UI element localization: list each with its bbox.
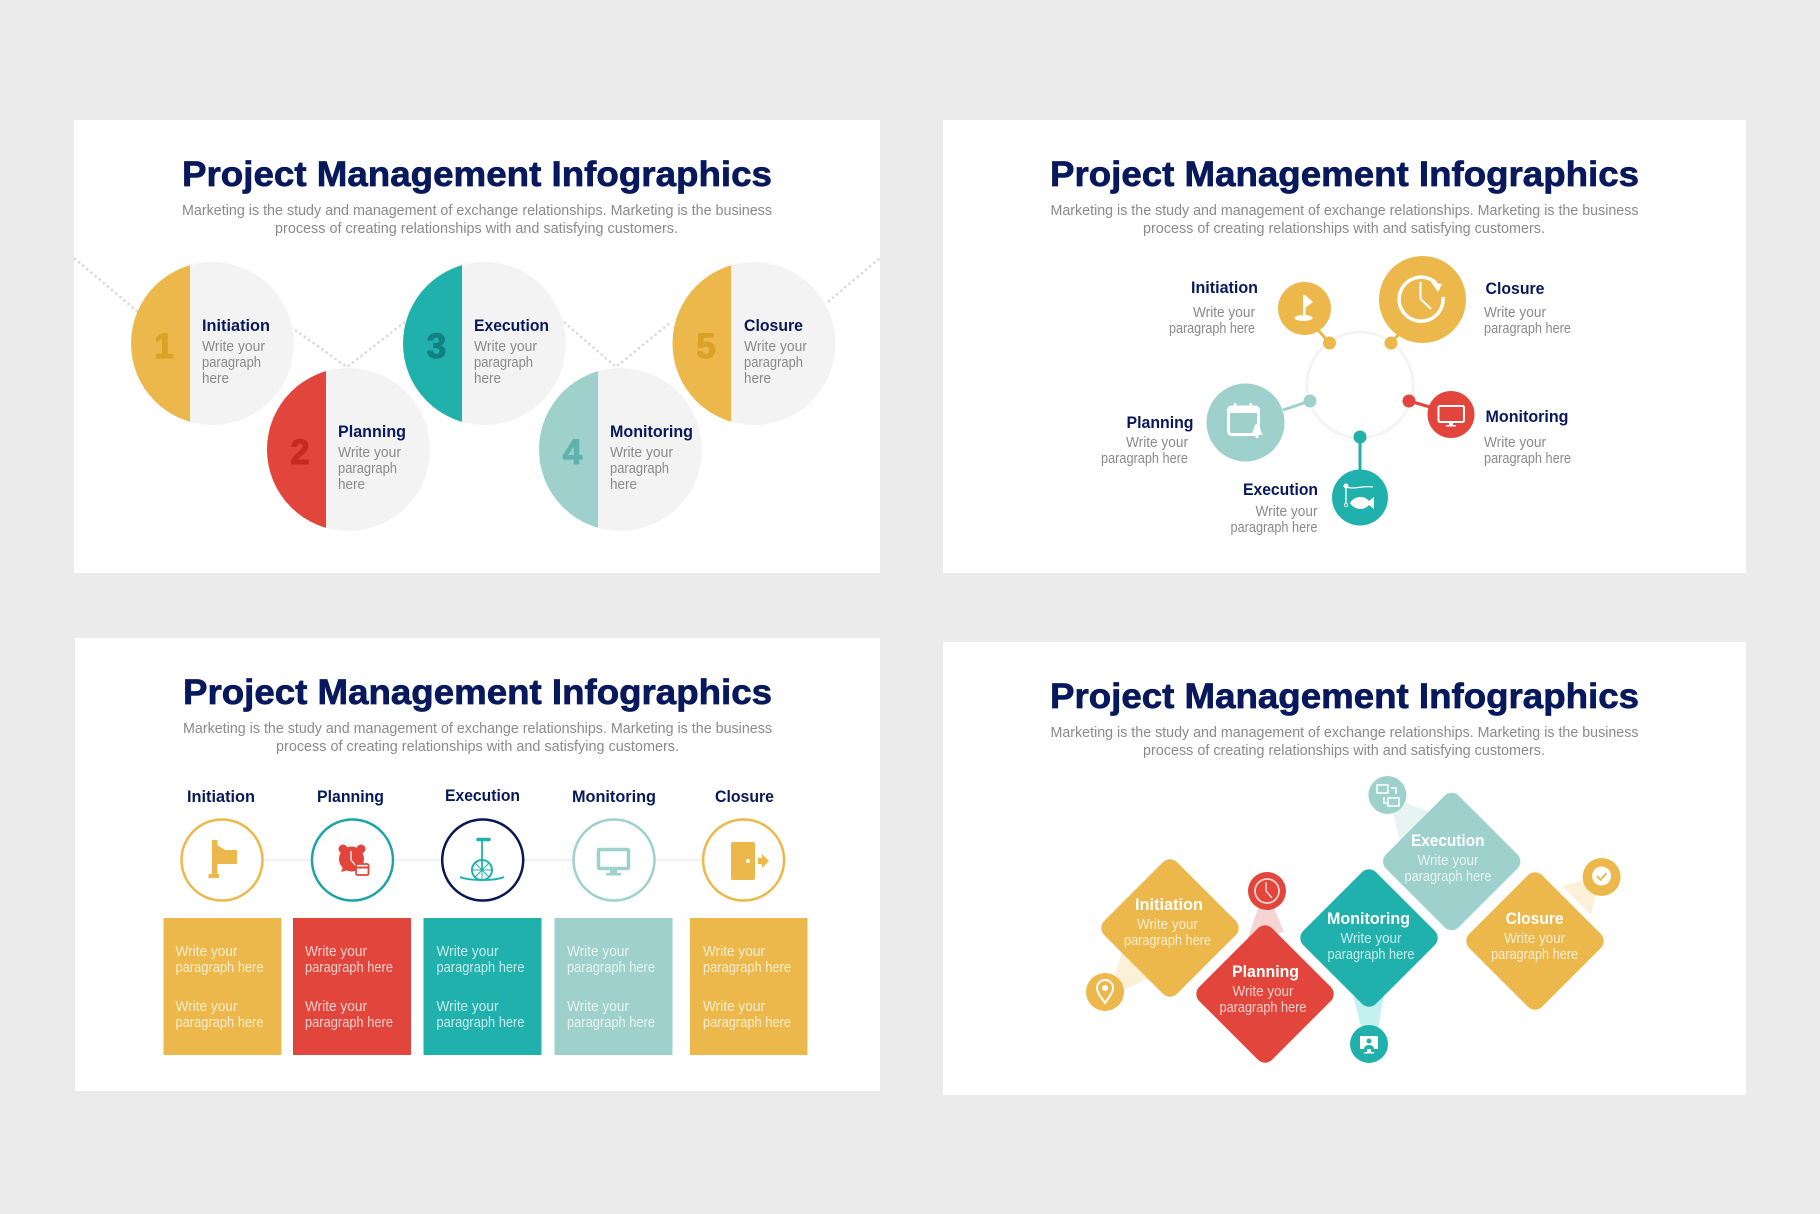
subtitle: Marketing is the study and management of exchange relationships. Marketing is the business	[1050, 724, 1638, 741]
step 2: planning: 2	[290, 433, 310, 472]
node: monitoring: Write your	[1484, 435, 1546, 451]
column: initiation: Write your	[176, 999, 238, 1015]
node: execution	[1230, 430, 1388, 536]
step 3: execution	[403, 262, 566, 425]
column: planning: Planning	[317, 787, 384, 806]
node: closure: Write your	[1484, 305, 1546, 321]
diamond: planning: Planning	[1232, 962, 1299, 981]
icon: check badge	[1583, 858, 1621, 896]
step 3: execution: paragraph	[474, 355, 533, 371]
node: execution: Write your	[1256, 504, 1318, 520]
panel: radial ring	[943, 120, 1746, 573]
column: planning: paragraph here	[305, 960, 393, 976]
diamond: monitoring	[1296, 865, 1442, 1011]
step 4: monitoring: here	[610, 477, 637, 493]
column: monitoring: paragraph here	[567, 1015, 655, 1031]
column: initiation: Initiation	[187, 787, 255, 806]
node: planning: paragraph here	[1101, 451, 1188, 467]
panel: numbered half circles	[74, 120, 880, 573]
node: initiation: paragraph here	[1169, 321, 1255, 337]
column: planning: paragraph here	[305, 1015, 393, 1031]
subtitle: Marketing is the study and management of exchange relationships. Marketing is the business	[182, 202, 772, 219]
step 1: initiation	[131, 262, 294, 425]
column: closure: Write your	[703, 999, 765, 1015]
column: initiation	[164, 787, 282, 1055]
column: closure	[690, 787, 808, 1055]
node: closure: paragraph here	[1484, 321, 1571, 337]
diamond: closure: paragraph here	[1491, 947, 1578, 963]
node: closure: Closure	[1486, 279, 1544, 298]
step 3: execution: here	[474, 371, 501, 387]
icon: alarm clock	[338, 844, 368, 875]
column: closure: Closure	[715, 787, 774, 806]
column: monitoring: paragraph here	[567, 960, 655, 976]
node: closure	[1379, 256, 1571, 350]
node: monitoring	[1402, 391, 1571, 467]
subtitle: Marketing is the study and management of exchange relationships. Marketing is the business	[183, 720, 772, 737]
column: initiation: Write your	[176, 944, 238, 960]
diamond: planning: Write your	[1232, 984, 1294, 1000]
diamond: closure	[1462, 868, 1608, 1014]
icon: monitor	[1438, 406, 1464, 426]
column: execution: Execution	[445, 786, 520, 805]
column: closure: Write your	[703, 944, 765, 960]
step 4: monitoring: Write your	[610, 445, 673, 461]
column: execution: Write your	[436, 999, 499, 1015]
node: planning: Write your	[1126, 435, 1188, 451]
step 2: planning	[267, 368, 430, 531]
diamond: closure: Closure	[1506, 909, 1564, 928]
diamond: initiation: Write your	[1137, 917, 1198, 933]
column: closure: paragraph here	[703, 1015, 791, 1031]
step 3: execution: 3	[427, 327, 446, 366]
title: Project Management Infographics	[1050, 155, 1639, 194]
title: Project Management Infographics	[1050, 677, 1639, 716]
node: monitoring: paragraph here	[1484, 451, 1571, 467]
step 1: initiation: 1	[154, 327, 174, 366]
step 3: execution: Execution	[474, 316, 549, 335]
step 4: monitoring: 4	[563, 433, 583, 472]
diamond: planning: paragraph here	[1220, 1000, 1306, 1016]
column: planning	[293, 787, 411, 1055]
diamond: monitoring: paragraph here	[1328, 947, 1414, 963]
column: monitoring: Write your	[567, 999, 629, 1015]
column: execution	[424, 786, 542, 1055]
node: initiation: Initiation	[1191, 278, 1258, 297]
diamond: execution: Write your	[1418, 853, 1479, 869]
subtitle: Marketing is the study and management of exchange relationships. Marketing is the business	[1050, 202, 1638, 219]
step 4: monitoring: Monitoring	[610, 422, 693, 441]
step 4: monitoring	[539, 368, 702, 531]
diamond: closure: Write your	[1504, 931, 1565, 947]
icon: location pin	[1086, 973, 1124, 1011]
column: closure: paragraph here	[703, 960, 791, 976]
node: monitoring: Monitoring	[1486, 407, 1568, 426]
column: initiation: paragraph here	[176, 960, 264, 976]
icon: connected monitors	[1368, 776, 1406, 814]
subtitle: process of creating relationships with and satisfying customers.	[1143, 220, 1545, 237]
subtitle	[1050, 724, 1638, 759]
node: execution: paragraph here	[1230, 520, 1318, 536]
node: planning	[1101, 384, 1316, 467]
diamond: execution: Execution	[1411, 831, 1484, 850]
column: monitoring	[554, 787, 672, 1055]
column: planning: Write your	[305, 999, 367, 1015]
step 5: closure: Closure	[744, 316, 803, 335]
diamond: initiation: Initiation	[1135, 895, 1203, 914]
step 4: monitoring: paragraph	[610, 461, 669, 477]
column: execution: paragraph here	[436, 960, 524, 976]
step 5: closure: here	[744, 371, 771, 387]
subtitle: process of creating relationships with and satisfying customers.	[276, 738, 679, 755]
step 1: initiation: paragraph	[202, 355, 261, 371]
icon: fish on a line	[1344, 484, 1374, 509]
panel: diamonds	[943, 642, 1746, 1095]
column: monitoring: Monitoring	[572, 787, 656, 806]
icon: door exit	[731, 842, 769, 880]
step 1: initiation: Write your	[202, 339, 265, 355]
subtitle	[183, 720, 772, 755]
diamond: monitoring: Monitoring	[1327, 909, 1410, 928]
node: planning: Planning	[1126, 413, 1194, 432]
step 5: closure: Write your	[744, 339, 807, 355]
icon: calendar with bell	[1228, 403, 1263, 438]
icon: flag	[208, 840, 237, 878]
step 5: closure	[672, 262, 836, 425]
icon: unicycle	[460, 840, 504, 880]
diamond: planning	[1192, 921, 1338, 1067]
diamond: initiation: paragraph here	[1124, 933, 1211, 949]
step 3: execution: Write your	[474, 339, 537, 355]
step 2: planning: Planning	[338, 422, 406, 441]
subtitle	[1050, 202, 1638, 237]
subtitle: process of creating relationships with and satisfying customers.	[1143, 742, 1545, 759]
step 2: planning: here	[338, 477, 365, 493]
icon: history clock	[1248, 872, 1286, 910]
title: Project Management Infographics	[182, 155, 772, 194]
step 2: planning: Write your	[338, 445, 401, 461]
step 1: initiation: Initiation	[202, 316, 270, 335]
diamond: initiation	[1097, 855, 1243, 1001]
column: execution: paragraph here	[436, 1015, 524, 1031]
icon: golf flag	[1294, 295, 1313, 321]
diamond: monitoring: Write your	[1340, 931, 1402, 947]
icon: monitor	[598, 850, 628, 876]
node: initiation	[1169, 278, 1336, 350]
node: initiation: Write your	[1193, 305, 1255, 321]
step 5: closure: 5	[696, 327, 716, 366]
panel: icon columns	[75, 638, 880, 1091]
title: Project Management Infographics	[183, 673, 772, 712]
step 2: planning: paragraph	[338, 461, 397, 477]
subtitle	[182, 202, 772, 237]
diamond: execution: paragraph here	[1404, 869, 1492, 885]
column: planning: Write your	[305, 944, 367, 960]
column: monitoring: Write your	[567, 944, 629, 960]
node: execution: Execution	[1243, 480, 1318, 499]
diamond: execution	[1379, 789, 1525, 934]
step 1: initiation: here	[202, 371, 229, 387]
column: initiation: paragraph here	[176, 1015, 264, 1031]
icon: presentation monitor	[1350, 1025, 1388, 1063]
icon: clock	[1399, 277, 1443, 321]
column: execution: Write your	[436, 944, 499, 960]
subtitle: process of creating relationships with and satisfying customers.	[275, 220, 678, 237]
step 5: closure: paragraph	[744, 355, 803, 371]
